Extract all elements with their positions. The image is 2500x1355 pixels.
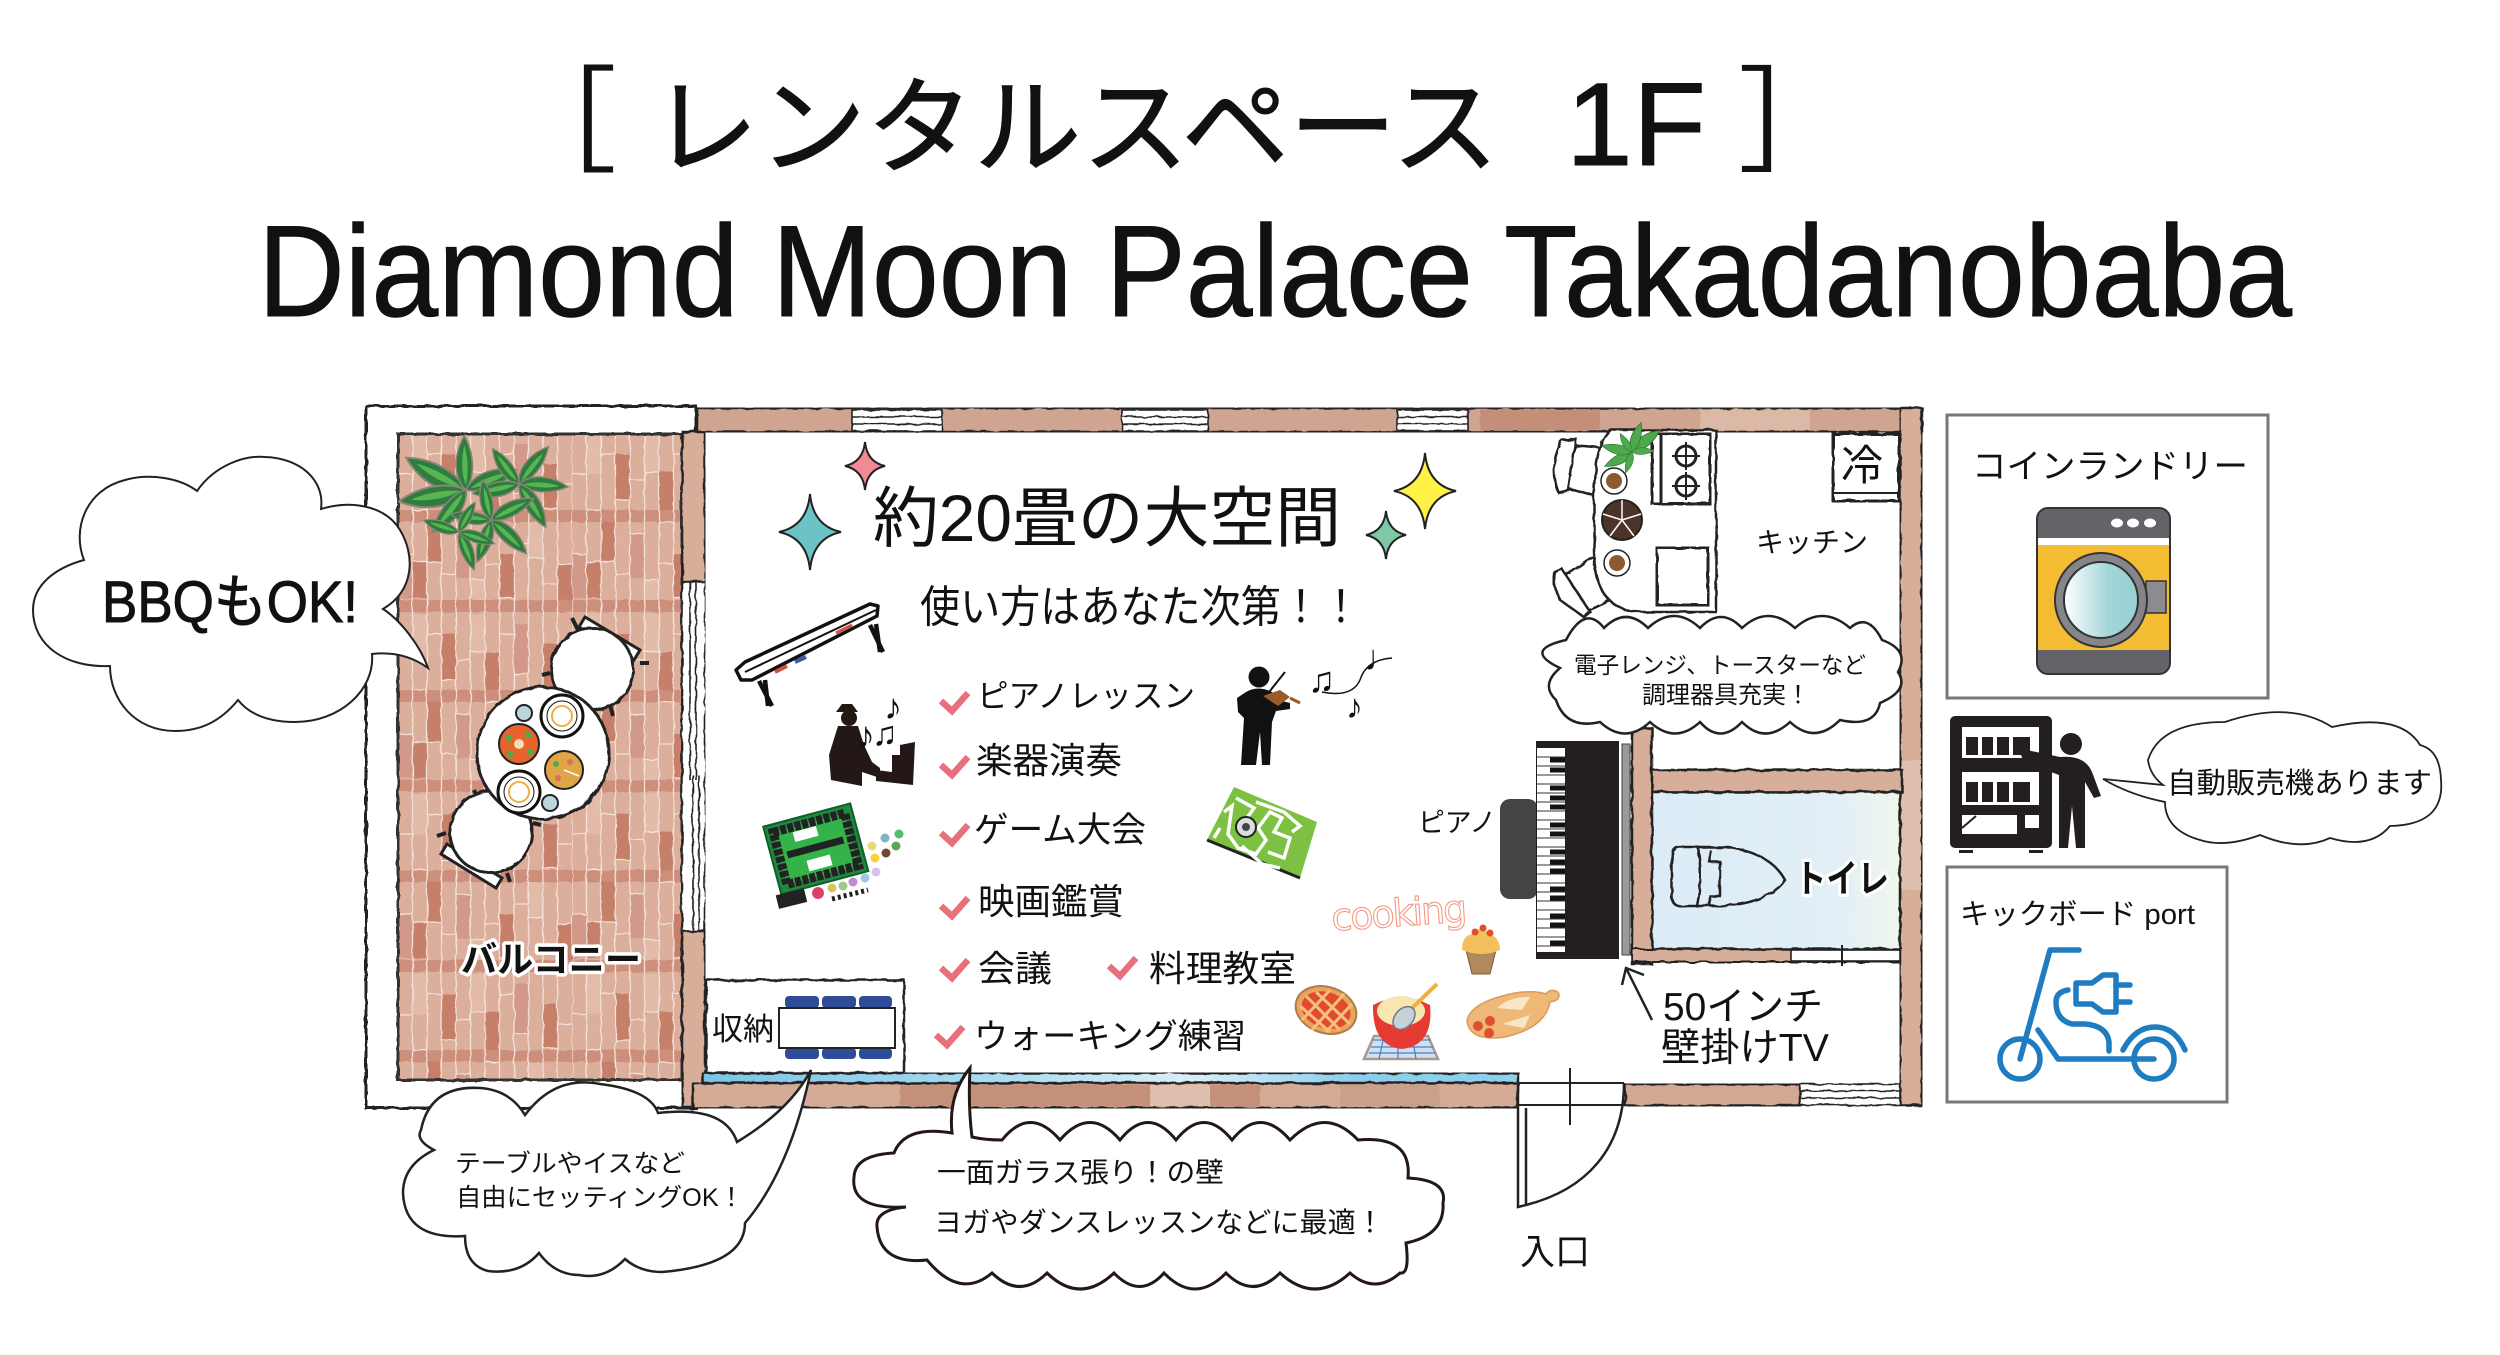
label: cooking script: cooking bbox=[1330, 886, 1469, 940]
fridge: 冷 bbox=[1841, 442, 1883, 489]
item: meeting: 会議 bbox=[978, 948, 1052, 989]
windows: top wall bbox=[852, 410, 1900, 1105]
icon: green maze board bbox=[1207, 787, 1317, 878]
icon: violinist silhouette with notes bbox=[1237, 637, 1400, 765]
piano bench bbox=[1500, 799, 1538, 899]
chair: lower bbox=[437, 790, 541, 888]
wall band: left bbox=[682, 432, 705, 1107]
piano keys bbox=[1537, 748, 1565, 952]
icon: keyboard on stand bbox=[736, 604, 883, 706]
panel: kickboard port bbox=[1947, 867, 2227, 1102]
callout: tables and chairs: 自由にセッティングOK！ bbox=[456, 1184, 744, 1212]
callout: glass wall bbox=[854, 1068, 1444, 1289]
toilet room floor bbox=[1652, 792, 1900, 949]
callout: kitchen appliances bbox=[1542, 616, 1902, 734]
icon: violinist silhouette with notes: ♪ bbox=[1346, 688, 1363, 726]
dining table with two chairs and food bbox=[437, 617, 649, 888]
callout: glass wall: ヨガやダンスレッスンなどに最適！ bbox=[934, 1207, 1384, 1238]
icon: washing machine bbox=[2037, 508, 2170, 674]
stored table bbox=[779, 1008, 895, 1048]
icon: pianist silhouette: ♪ bbox=[884, 686, 902, 727]
window: left wall bbox=[682, 582, 705, 931]
panel: main building walls bbox=[682, 408, 1922, 1272]
check marks bbox=[936, 693, 1136, 1045]
icon: pianist silhouette bbox=[829, 686, 915, 786]
plate bbox=[498, 771, 540, 813]
icon: electric scooter bbox=[2000, 950, 2185, 1079]
label: entrance: 入口 bbox=[1520, 1231, 1590, 1272]
cups bbox=[516, 705, 558, 811]
icon: cupcake bbox=[1462, 924, 1500, 974]
storage room outline bbox=[706, 980, 904, 1073]
callout: vending machine bbox=[2103, 712, 2441, 844]
icon: violinist silhouette with notes: ♫ bbox=[1308, 659, 1335, 700]
coffee cup bbox=[1604, 550, 1630, 576]
subheading: how you use it is up to you: 使い方はあなた次第！！ bbox=[920, 583, 1361, 632]
wall band: right bbox=[1900, 408, 1922, 1105]
game pieces bbox=[812, 830, 904, 899]
chair: kitchen lower bbox=[1554, 554, 1614, 617]
interior floor bbox=[705, 432, 1900, 1082]
callout: tables and chairs: テーブルやイスなど bbox=[455, 1150, 685, 1178]
callout: glass wall: 一面ガラス張り！の壁 bbox=[937, 1157, 1224, 1188]
label: 50 inch wall-mounted TV bbox=[1661, 986, 1829, 1070]
round table bbox=[477, 687, 609, 819]
title: rental space 1F: ］ bbox=[1738, 59, 1853, 187]
fridge bbox=[1833, 434, 1899, 501]
piano body bbox=[1536, 741, 1619, 959]
chair: upper bbox=[542, 617, 649, 716]
label: coin laundry: コインランドリー bbox=[1972, 448, 2248, 486]
title: rental space 1F: 1F bbox=[1566, 59, 1706, 191]
icon: sparkles bbox=[779, 442, 1456, 570]
label: balcony: バルコニー bbox=[461, 939, 641, 980]
wall-mounted TV bbox=[1622, 744, 1630, 955]
callout: BBQ OK bbox=[33, 457, 428, 731]
callout: BBQ OK: BBQもOK! bbox=[102, 570, 358, 635]
wall band: top bbox=[697, 408, 1922, 432]
glass wall bbox=[703, 1073, 1518, 1083]
pizza bbox=[499, 724, 539, 764]
sink bbox=[1657, 548, 1708, 605]
toilet fixture bbox=[1672, 847, 1785, 906]
toilet door bbox=[1791, 945, 1900, 966]
item: game tournament: ゲーム大会 bbox=[974, 811, 1146, 850]
label: 50 inch wall-mounted TV: 50インチ bbox=[1663, 986, 1823, 1029]
panel: vending machine bbox=[1950, 712, 2441, 853]
icon: violinist silhouette with notes: ♩ bbox=[1364, 637, 1400, 678]
pizza bbox=[545, 751, 583, 789]
label: 50 inch wall-mounted TV: 壁掛けTV bbox=[1661, 1027, 1829, 1070]
counter divider bbox=[1647, 430, 1649, 612]
door and swing arc bbox=[1518, 1068, 1624, 1207]
item: instrument performance: 楽器演奏 bbox=[976, 740, 1122, 781]
island counter and table bbox=[1594, 430, 1716, 612]
brick floor bbox=[398, 434, 682, 1080]
icon: person at machine bbox=[2021, 733, 2101, 848]
callout: tables and chairs bbox=[403, 1070, 811, 1276]
balcony outer frame bbox=[366, 406, 696, 1108]
icon: lattice pie bbox=[1289, 979, 1363, 1041]
stored chairs bbox=[785, 996, 892, 1059]
heading: about 20 tatami space: 約20畳の大空間 bbox=[873, 481, 1341, 555]
label: piano: ピアノ bbox=[1418, 808, 1496, 838]
panel: coin laundry bbox=[1947, 415, 2268, 698]
panel: storage bbox=[706, 980, 904, 1073]
icon: pianist silhouette: ♫ bbox=[872, 715, 898, 753]
icon: potted plant bbox=[398, 436, 569, 572]
icon: cutting board with food bbox=[1467, 990, 1559, 1038]
wall band: bottom left section bbox=[693, 1083, 1518, 1108]
label: vending machine: 自動販売機あります bbox=[2167, 767, 2432, 800]
title: Diamond Moon Palace Takadanobaba: Diamond Moon Palace Takadanobaba bbox=[258, 198, 2293, 344]
icon: mixing bowl with whisk bbox=[1364, 984, 1438, 1059]
wall band: bottom right section bbox=[1625, 1084, 1800, 1106]
arrow: to TV bbox=[1622, 968, 1652, 1020]
icon: vending machine bbox=[1950, 716, 2052, 853]
title: rental space 1F bbox=[502, 59, 1853, 191]
panel: piano and TV bbox=[1418, 741, 1829, 1070]
plate bbox=[541, 695, 583, 737]
partition walls bbox=[1632, 728, 1902, 964]
icon: pianist silhouette: ♪ bbox=[856, 715, 875, 757]
cake bbox=[1602, 500, 1642, 540]
label: storage: 収納 bbox=[712, 1012, 774, 1047]
panel: kitchen bbox=[1554, 421, 1899, 617]
stove bbox=[1652, 434, 1710, 504]
game card bbox=[776, 888, 807, 909]
game board bbox=[763, 803, 868, 894]
item: piano lesson: ピアノレッスン bbox=[977, 678, 1195, 714]
cooking illustrations bbox=[1289, 886, 1559, 1059]
panel: balcony bbox=[366, 406, 696, 1108]
callout: kitchen appliances: 調理器具充実！ bbox=[1642, 682, 1810, 709]
label: kickboard port: キックボード port bbox=[1960, 899, 2195, 931]
icon: board game bbox=[763, 803, 904, 909]
panel: toilet bbox=[1632, 728, 1902, 966]
callout: kitchen appliances: 電子レンジ、トースターなど bbox=[1574, 652, 1866, 678]
item: movie watching: 映画鑑賞 bbox=[978, 881, 1124, 922]
checklist: uses of the space bbox=[936, 678, 1296, 1056]
title: rental space 1F: ［ bbox=[502, 59, 617, 187]
label: kitchen: キッチン bbox=[1756, 527, 1868, 558]
label: toilet: トイレ bbox=[1795, 859, 1889, 901]
item: walking practice: ウォーキング練習 bbox=[974, 1018, 1246, 1056]
title: rental space 1F: レンタルスペース bbox=[651, 70, 1499, 188]
chair: kitchen upper bbox=[1554, 439, 1606, 498]
item: cooking class: 料理教室 bbox=[1149, 948, 1296, 989]
coffee cup bbox=[1601, 468, 1627, 494]
icon: small plant bbox=[1601, 421, 1663, 474]
